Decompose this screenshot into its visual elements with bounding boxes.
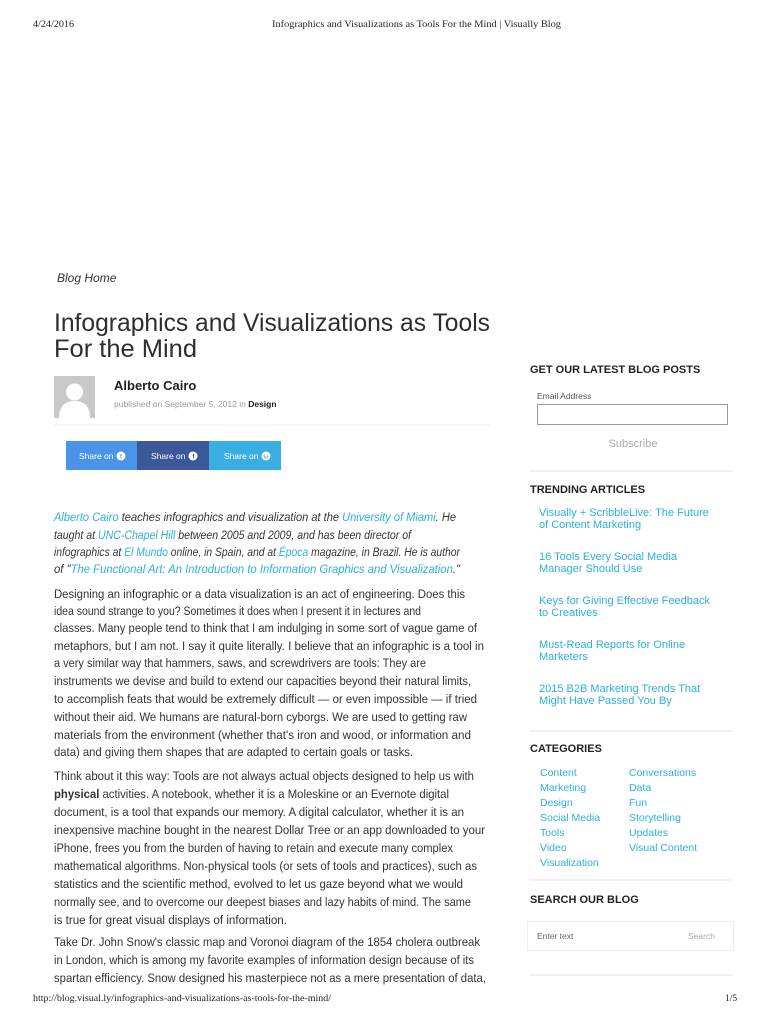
- share buttons: Share on: [224, 451, 259, 461]
- print header: 4/24/2016: [33, 20, 74, 30]
- paragraph: engineering: metaphors, but I am not. I say it quite literally. I believe that an infographic is a tool in: [54, 639, 484, 653]
- title: [54, 309, 490, 363]
- print header: Infographics and Visualizations as Tools For the Mind | Visually Blog: [272, 19, 561, 30]
- sidebar: trending articles: Manager Should Use: [539, 563, 642, 575]
- paragraph: engineering: instruments we devise and build to extend our capacities beyond their natural limits,: [54, 674, 471, 688]
- paragraph: engineering: [53, 587, 484, 759]
- paragraph: engineering: materials from the environment (whether that's iron and wood, or information and: [54, 728, 471, 742]
- share buttons: Share on: [151, 451, 186, 461]
- print footer: 1/5: [725, 994, 737, 1004]
- paragraph: engineering: Designing an infographic or a data visualization is an act of engineering. Does this: [54, 587, 465, 601]
- sidebar: search: SEARCH OUR BLOG: [530, 894, 639, 906]
- paragraph: engineering: idea sound strange to you? Sometimes it does when I present it in lectures and: [54, 604, 421, 618]
- sidebar: trending articles: 16 Tools Every Social Media: [539, 551, 678, 563]
- paragraph: tools: is true for great visual displays of information.: [54, 913, 287, 927]
- sidebar: categories: Conversations: [629, 767, 696, 779]
- share buttons: f: [192, 454, 195, 460]
- sidebar: subscribe: Subscribe: [609, 438, 657, 450]
- intro paragraph (italic): taught at UNC-Chapel Hill between 2005 and 2009, and has been director of: [54, 528, 412, 542]
- paragraph: tools: Think about it this way: Tools are not always actual objects designed to help us with: [54, 769, 474, 783]
- icon: avatar: [54, 376, 95, 418]
- paragraph: tools: [54, 769, 485, 927]
- author block: published on September 5, 2012 in Design: [114, 399, 277, 409]
- sidebar: subscribe: GET OUR LATEST BLOG POSTS: [530, 364, 700, 376]
- sidebar: search: Search: [688, 931, 715, 941]
- paragraph: John Snow: Take Dr. John Snow's classic map and Voronoi diagram of the 1854 cholera outbreak: [54, 935, 481, 949]
- paragraph: engineering: data) and giving them shapes that are adapted to certain goals or tasks.: [54, 745, 413, 759]
- intro paragraph (italic): [53, 510, 461, 576]
- intro paragraph (italic): of "The Functional Art: An Introduction to Information Graphics and Visualization.": [54, 562, 461, 576]
- paragraph: tools: statistics and the scientific method, evolved to let us gaze beyond what we would: [54, 877, 463, 891]
- share buttons: t: [120, 454, 122, 460]
- paragraph: John Snow: [54, 935, 486, 985]
- sidebar: categories: Updates: [629, 827, 668, 839]
- paragraph: engineering: to accomplish feats that would be extremely difficult — or even impossible — if tried: [54, 692, 477, 706]
- print footer: [33, 993, 737, 1004]
- paragraph: engineering: classes. Many people tend to think that I am indulging in some sort of vague game of: [54, 621, 478, 635]
- sidebar: trending articles: of Content Marketing: [539, 519, 641, 531]
- paragraph: John Snow: in London, which is among my favorite examples of information design because of its: [54, 953, 474, 967]
- title: Infographics and Visualizations as Tools: [54, 309, 490, 337]
- sidebar: trending articles: to Creatives: [539, 607, 598, 619]
- paragraph: tools: mathematical algorithms. Non-physical tools (or sets of tools and practices), such as: [54, 859, 477, 873]
- sidebar: trending articles: Must-Read Reports for Online: [539, 639, 685, 651]
- sidebar: categories: Video: [540, 842, 567, 854]
- sidebar: trending articles: TRENDING ARTICLES: [530, 484, 645, 496]
- paragraph: tools: physical activities. A notebook, whether it is a Moleskine or an Evernote digital: [54, 787, 449, 801]
- paragraph: tools: inexpensive machine bought in the nearest Dollar Tree or an app downloaded to your: [54, 823, 485, 837]
- paragraph: engineering: without their aid. We humans are natural-born cyborgs. We are used to getting raw: [53, 710, 467, 724]
- intro paragraph (italic): infographics at El Mundo online, in Spain, and at Época magazine, in Brazil. He is author: [54, 544, 461, 559]
- share buttons: Share on: [79, 451, 114, 461]
- paragraph: tools: normally see, and to overcome our deepest biases and lazy habits of mind. The same: [54, 895, 471, 909]
- paragraph: engineering: a very similar way that hammers, saws, and screwdrivers are tools: They are: [54, 656, 426, 670]
- breadcrumb: Blog Home: Blog Home: [57, 271, 117, 285]
- sidebar: categories: Storytelling: [629, 812, 681, 824]
- sidebar: categories: Content: [540, 767, 577, 779]
- share buttons: [66, 441, 281, 470]
- sidebar: search: [528, 894, 734, 975]
- sidebar: categories: Visualization: [540, 857, 599, 869]
- author block: Alberto Cairo: [114, 378, 196, 393]
- sidebar: categories: [530, 743, 733, 880]
- sidebar: categories: CATEGORIES: [530, 743, 602, 755]
- sidebar: categories: Social Media: [540, 812, 600, 824]
- sidebar: search: Enter text: [537, 931, 574, 941]
- sidebar: categories: Visual Content: [629, 842, 697, 854]
- sidebar: categories: Data: [629, 782, 651, 794]
- sidebar: trending articles: Keys for Giving Effective Feedback: [539, 595, 710, 607]
- paragraph: John Snow: spartan efficiency. Snow designed his masterpiece not as a mere presentation of data,: [54, 971, 486, 985]
- sidebar: categories: Design: [540, 797, 573, 809]
- share buttons: in: [264, 454, 269, 460]
- print header: [33, 19, 561, 30]
- sidebar: categories: Marketing: [540, 782, 586, 794]
- sidebar: subscribe: [530, 364, 733, 471]
- sidebar: categories: Tools: [540, 827, 565, 839]
- sidebar: trending articles: [530, 484, 733, 731]
- sidebar: trending articles: Marketers: [539, 651, 588, 663]
- sidebar: trending articles: Visually + ScribbleLive: The Future: [539, 507, 709, 519]
- sidebar: categories: Fun: [629, 797, 647, 809]
- sidebar: trending articles: 2015 B2B Marketing Trends That: [539, 683, 700, 695]
- paragraph: tools: document, is a tool that expands our memory. A digital calculator, whether it is an: [54, 805, 464, 819]
- sidebar: subscribe: Email Address: [537, 391, 591, 401]
- paragraph: tools: iPhone, frees you from the burden of having to retain and execute many complex: [54, 841, 453, 855]
- sidebar: trending articles: Might Have Passed You By: [539, 695, 672, 707]
- author block: [54, 376, 490, 425]
- title: For the Mind: [54, 335, 197, 363]
- print footer: http://blog.visual.ly/infographics-and-visualizations-as-tools-for-the-mind/: [33, 993, 331, 1004]
- intro paragraph (italic): Alberto Cairo teaches infographics and visualization at the University of Miami. He: [53, 510, 456, 524]
